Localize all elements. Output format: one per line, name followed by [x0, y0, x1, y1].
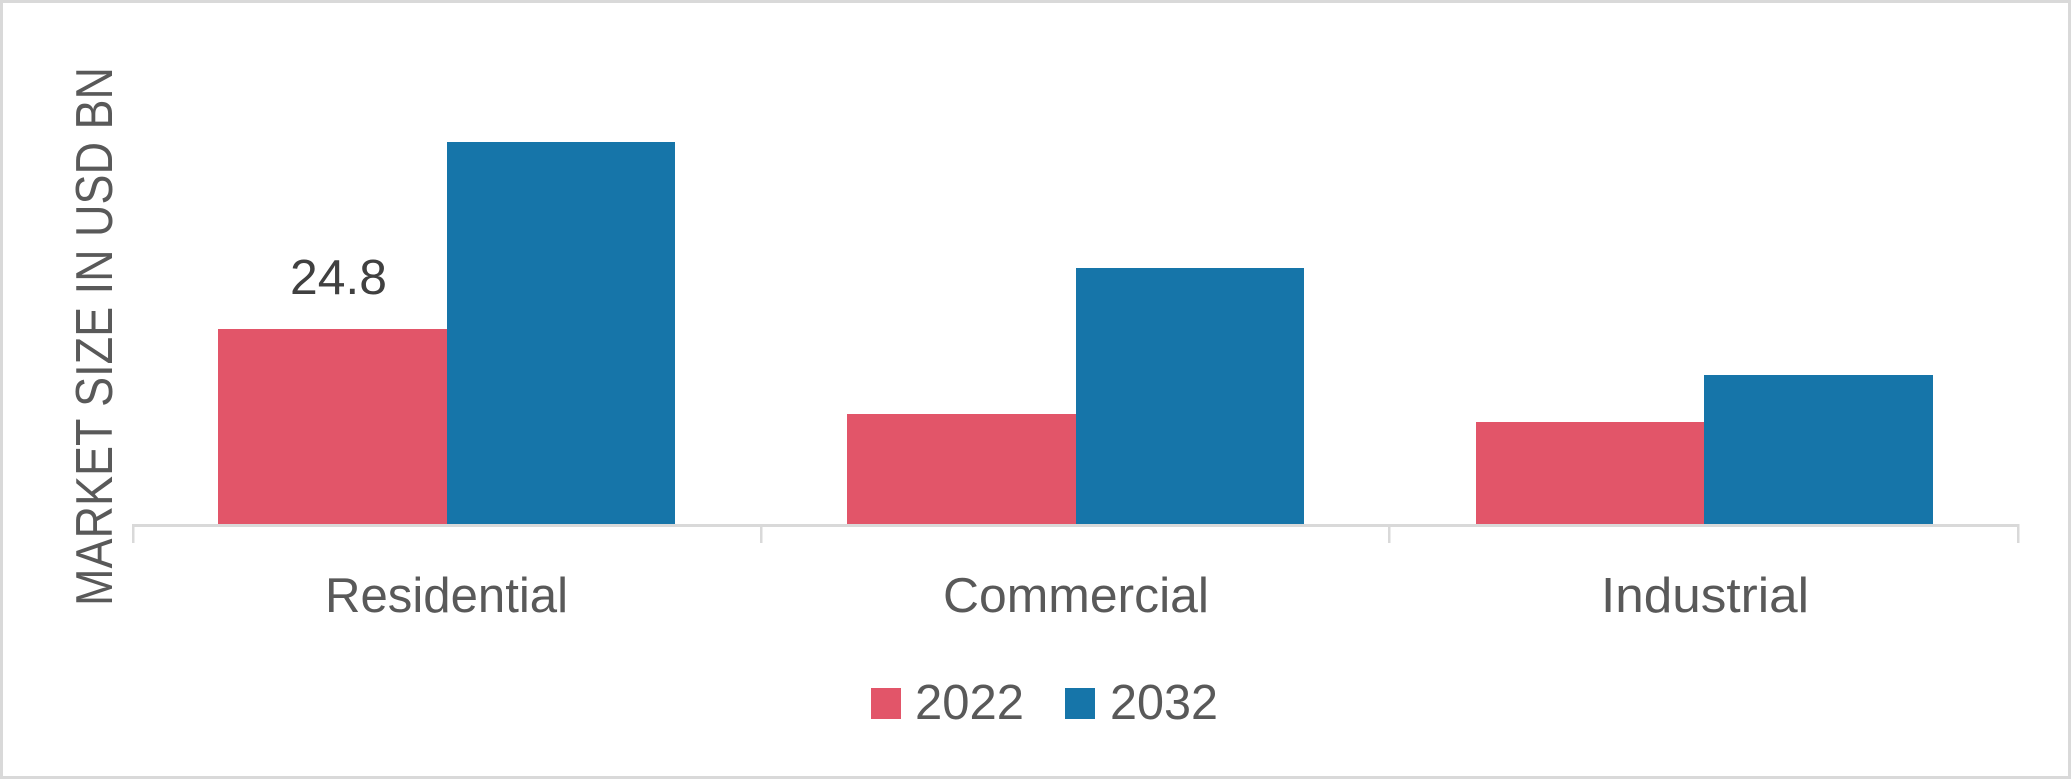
category label: Industrial: Industrial	[1601, 569, 1809, 623]
y axis title: MARKET SIZE IN USD BN	[66, 67, 124, 606]
legend	[871, 676, 1218, 730]
x axis with ticks	[132, 524, 2020, 543]
bars: Residential	[218, 142, 675, 524]
category label: Residential: Residential	[325, 569, 568, 623]
bars: Industrial	[1476, 375, 1933, 524]
legend label 2022: 2022	[915, 676, 1024, 730]
legend swatch 2032	[1065, 688, 1095, 719]
bars: Commercial	[847, 268, 1304, 524]
legend label 2032: 2032	[1110, 676, 1218, 730]
data label: 24.8: 24.8	[290, 251, 387, 305]
category label: Commercial: Commercial	[943, 569, 1209, 623]
legend swatch 2022	[871, 688, 901, 719]
